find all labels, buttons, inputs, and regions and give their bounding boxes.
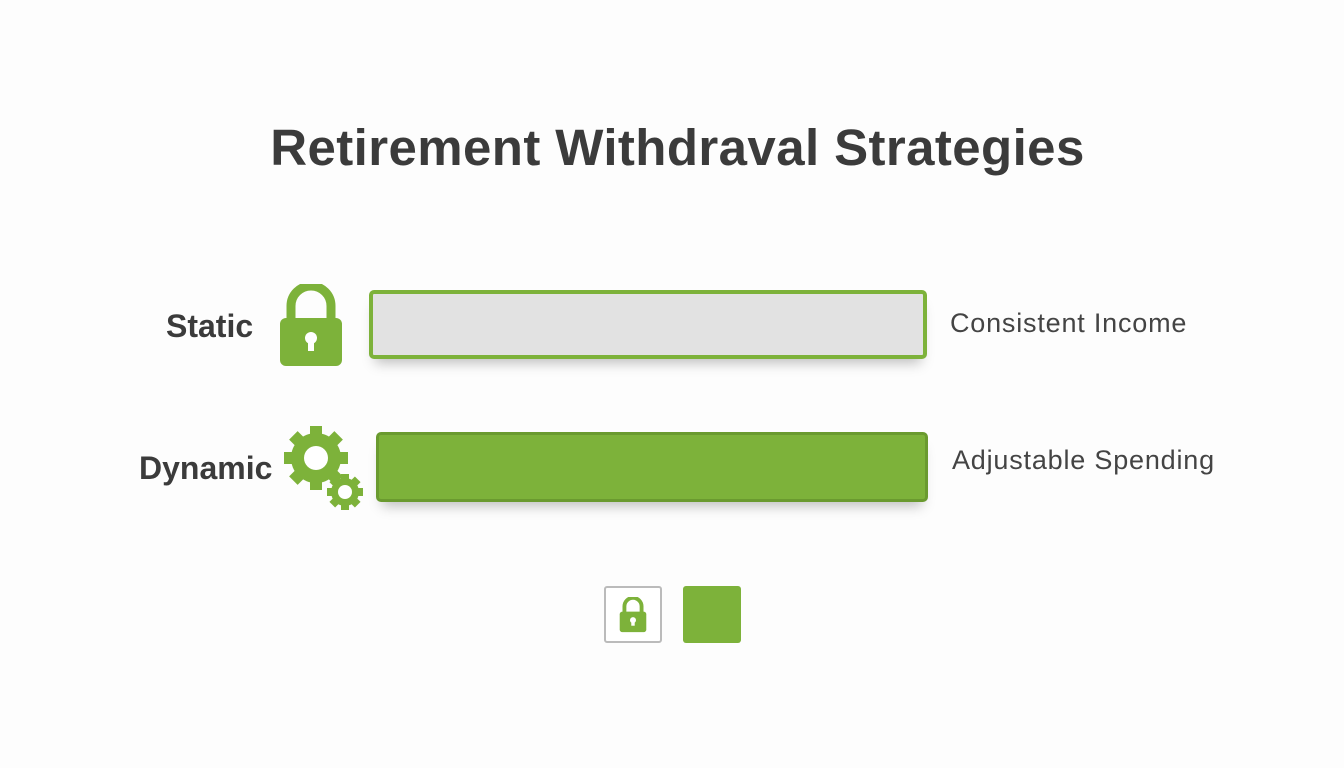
legend: lock box	[604, 586, 662, 643]
label: Dynamic: Dynamic	[139, 450, 272, 486]
icon: gears	[284, 426, 363, 510]
label: Static: Static	[166, 308, 253, 344]
legend: green box	[683, 586, 741, 643]
icon: lock	[280, 284, 342, 366]
text: Consistent Income: Consistent Income	[950, 308, 1187, 338]
bar: static	[369, 290, 927, 359]
bar: dynamic	[376, 432, 928, 502]
legend	[604, 586, 741, 643]
text: Adjustable Spending: Adjustable Spending	[952, 445, 1215, 475]
title: Retirement Withdraval Strategies	[270, 119, 1085, 176]
